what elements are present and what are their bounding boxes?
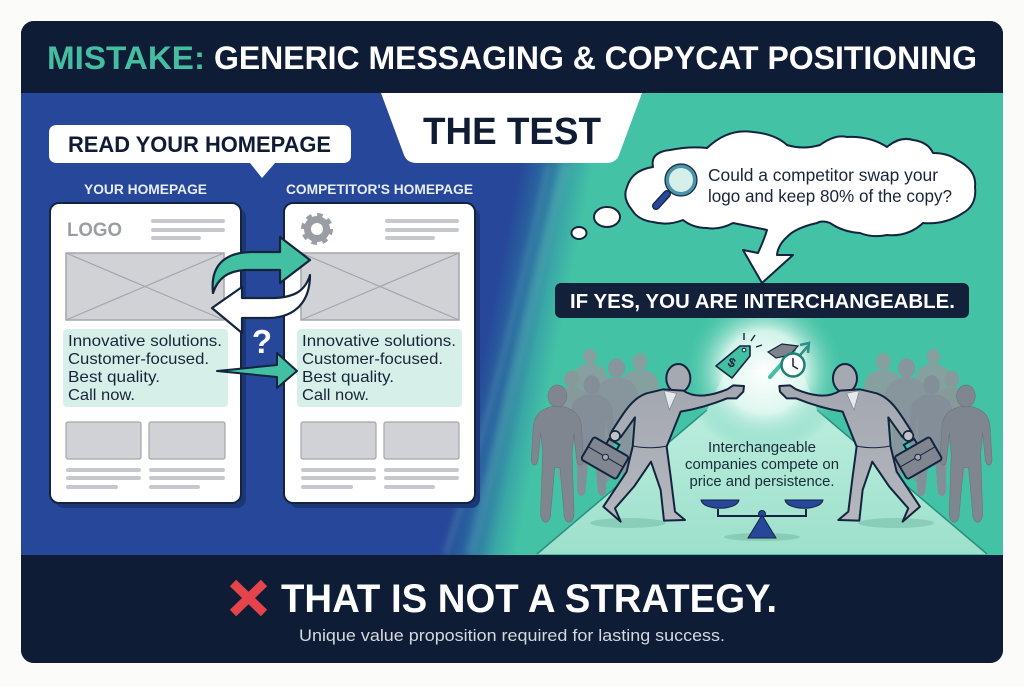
- generic copy block: Call now.: [68, 387, 135, 404]
- read your homepage callout: READ YOUR HOMEPAGE: [68, 132, 331, 157]
- label: competitor's homepage: COMPETITOR'S HOMEPAGE: [286, 182, 473, 197]
- title highlight word: MISTAKE:: [47, 40, 205, 76]
- generic copy block: Customer-focused.: [68, 351, 209, 368]
- question text: Could a competitor swap your: [708, 165, 938, 185]
- shadow under figures: [590, 518, 934, 541]
- hero image placeholder: [66, 253, 224, 320]
- scene caption: companies compete on: [685, 456, 839, 473]
- icon: magnifier: [656, 164, 697, 206]
- the test tab: THE TEST: [423, 111, 601, 153]
- crowd right: [863, 349, 992, 522]
- icon: hammer, clock and arrow: [768, 343, 809, 377]
- content lines: [66, 468, 225, 489]
- title text: GENERIC MESSAGING & COPYCAT POSITIONING: [214, 40, 977, 76]
- generic copy block: Innovative solutions.: [68, 333, 222, 350]
- generic copy block: Innovative solutions.: [302, 333, 456, 350]
- footer bar: [21, 555, 1003, 663]
- title bar: [21, 21, 1003, 70]
- transition streaks: [445, 165, 565, 555]
- panel: your homepage wireframe: [50, 203, 246, 508]
- scene caption: Interchangeable: [708, 439, 816, 456]
- panel: competitor homepage wireframe: [284, 203, 480, 508]
- floor edges: [537, 410, 987, 554]
- footer headline: THAT IS NOT A STRATEGY.: [281, 577, 777, 621]
- nav lines: [385, 219, 459, 240]
- arrow: teal swap arrow: [213, 237, 310, 293]
- icon: price tag: [716, 333, 762, 378]
- generic copy block: [63, 329, 228, 407]
- icon: gear: [303, 215, 331, 243]
- label: your homepage: YOUR HOMEPAGE: [84, 182, 207, 197]
- thought dots: [594, 207, 620, 227]
- left businessman: [581, 364, 744, 522]
- content lines: [301, 468, 459, 489]
- banner: if yes: [555, 283, 969, 318]
- floor spotlight: [537, 370, 987, 554]
- banner: if yes: IF YES, YOU ARE INTERCHANGEABLE.: [570, 291, 955, 313]
- crowd left: [531, 349, 660, 522]
- hero image placeholder: [301, 253, 459, 320]
- logo placeholder: LOGO: [67, 220, 122, 241]
- icon: red x: [233, 583, 264, 613]
- content boxes: [66, 422, 225, 459]
- content boxes: [301, 422, 459, 459]
- arrow: copy arrow: [217, 353, 297, 388]
- generic copy block: Best quality.: [68, 369, 160, 386]
- arrow: white swap arrow: [212, 275, 310, 333]
- the test tab: [381, 93, 642, 163]
- right businessman: [779, 364, 942, 522]
- footer subtext: Unique value proposition required for lasting success.: [299, 627, 725, 645]
- scene caption: price and persistence.: [690, 473, 834, 490]
- generic copy block: Best quality.: [302, 369, 394, 386]
- icon: price tag: $: [726, 354, 739, 371]
- question text: [708, 165, 952, 206]
- background split: blue to teal: [21, 93, 1003, 555]
- question text: logo and keep 80% of the copy?: [708, 186, 952, 206]
- thought bubble: [572, 131, 975, 283]
- generic copy block: [297, 329, 462, 407]
- read your homepage callout: [49, 125, 351, 178]
- question mark: ?: [252, 323, 272, 360]
- generic copy block: Call now.: [302, 387, 369, 404]
- nav lines: [151, 219, 225, 240]
- glow: [692, 318, 836, 450]
- generic copy block: Customer-focused.: [302, 351, 443, 368]
- balance scale: [701, 500, 823, 538]
- scene caption: [685, 439, 839, 490]
